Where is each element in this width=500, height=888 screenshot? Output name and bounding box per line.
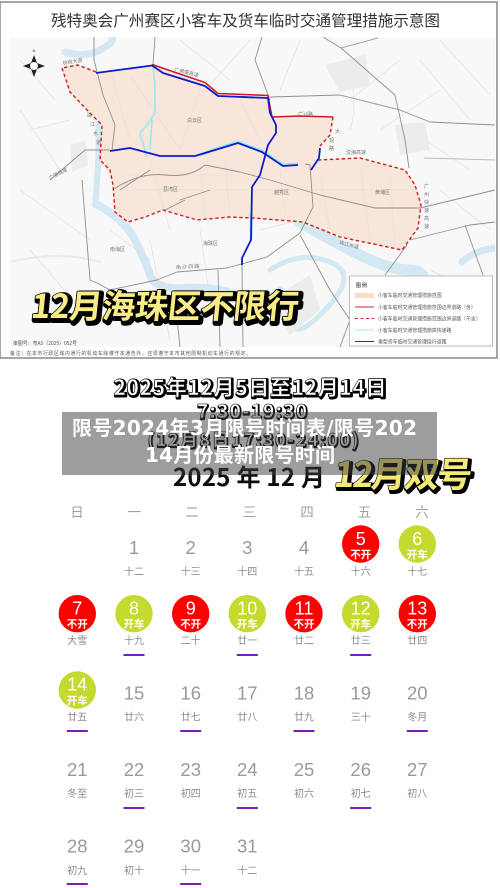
week 2: 11 (295, 598, 313, 618)
week 2: 二十 (181, 632, 201, 647)
week 2 (59, 595, 436, 656)
map labels (48, 57, 390, 271)
week 2: 开车 (237, 616, 258, 632)
week 2: 不开 (294, 616, 315, 632)
map labels: 南海区 (110, 246, 125, 253)
map labels: 广佛肇高速 (174, 66, 199, 79)
weekday row: 四 (300, 501, 314, 521)
label: vertical waterway: 路 (329, 145, 334, 152)
label: vertical waterway: 快 (424, 199, 429, 206)
week 5: 十二 (237, 862, 257, 877)
label: vertical waterway: 广 (424, 183, 429, 190)
grey built-up areas (70, 55, 430, 335)
week 5: 十一 (181, 862, 201, 877)
weekday row: 日 (70, 501, 84, 521)
week 3: 冬月 (407, 708, 427, 724)
time heading: 7:30-19:30 (198, 398, 308, 425)
map frame (0, 2, 497, 358)
weekday row (70, 501, 429, 521)
week 3: 开车 (67, 693, 88, 708)
week 3: 廿六 (124, 708, 144, 724)
weekday row: 三 (243, 501, 256, 521)
week 3: 18 (294, 682, 314, 704)
exception time heading: (12月8日17:30-24:00) (148, 428, 359, 453)
week 2: 10 (237, 598, 257, 618)
week 4: 22 (124, 759, 144, 780)
label: vertical waterway: 道 (96, 139, 101, 146)
banner: Haizhu not restricted: 12月海珠区不限行 (29, 280, 302, 328)
panel: traffic map (0, 2, 497, 358)
map labels: 白云区 (187, 117, 202, 124)
legend: 小客车临时交通管理措施范围 (378, 292, 442, 299)
week 1: 3 (242, 537, 252, 558)
week 2: 廿四 (407, 632, 427, 647)
label: vertical waterway: 江 (90, 121, 95, 128)
week 4: 27 (407, 759, 428, 780)
week 5: 初九 (67, 862, 87, 877)
map title: 残特奥会广州赛区小客车及货车临时交通管理措施示意图 (51, 9, 440, 31)
week 5: 31 (237, 836, 258, 856)
week 2: 廿三 (351, 632, 371, 647)
week 1: 4 (299, 537, 309, 558)
week 3: 19 (350, 682, 371, 704)
week 1: 不开 (350, 547, 372, 562)
week 4: 初七 (351, 785, 371, 800)
week 2: 开车 (124, 616, 144, 632)
even-number badge: 12月双号 (332, 447, 475, 498)
week 1: 十三 (181, 563, 201, 578)
map labels: 广佛高速 (48, 166, 69, 182)
week 1: 十六 (351, 563, 371, 578)
week 3: 廿九 (294, 708, 314, 724)
week 4: 初三 (124, 785, 144, 800)
icon: compass: N (32, 48, 36, 53)
week 1: 十二 (124, 563, 144, 578)
week 3: 三十 (351, 708, 371, 724)
week 3: 廿八 (237, 708, 257, 724)
week 4: 初四 (181, 785, 201, 800)
week 5: 30 (180, 836, 201, 856)
label: vertical waterway: 速 (424, 223, 429, 230)
exception time heading: (12月8日17:30-24:00) (148, 427, 358, 452)
week 4: 初五 (237, 785, 257, 800)
calendar (59, 501, 436, 885)
legend: 图 例 (356, 282, 367, 289)
time heading: 7:30-19:30 (197, 397, 307, 424)
map labels: 沈海高速 (346, 149, 366, 156)
week 4: 初六 (294, 785, 314, 800)
week 4: 21 (67, 759, 88, 780)
week 1: 5 (356, 529, 366, 549)
week 2: 不开 (180, 616, 202, 632)
week 1: 十四 (237, 563, 257, 578)
week 4: 26 (350, 759, 371, 780)
weekday row: 五 (358, 501, 371, 521)
week 4: 25 (294, 759, 314, 780)
panel: calendar heading (114, 372, 477, 500)
week 2: 12 (351, 598, 371, 618)
label: vertical waterway: 高 (424, 215, 429, 222)
week 3: 17 (237, 682, 258, 704)
week 5: 29 (124, 836, 144, 856)
rivers (10, 38, 495, 329)
legend (350, 276, 492, 346)
week 1: 十七 (407, 563, 427, 578)
week 3 (59, 671, 428, 732)
week 2: 十九 (124, 632, 144, 647)
dashed boundary (62, 65, 421, 250)
overlay title text: 限号2024年3月限号时间表/限号202 (72, 416, 417, 440)
weekday row: 二 (185, 501, 199, 521)
week 4: 24 (237, 759, 258, 780)
label: vertical waterway: 速 (424, 207, 429, 214)
legend: 小客车临时交通管理措施高快速路 (378, 327, 451, 334)
week 4: 初八 (407, 785, 427, 800)
week 5 (67, 836, 258, 885)
map labels: 黄埔区 (375, 189, 390, 196)
month heading: 2025 年 12 月 (173, 458, 325, 493)
map approval number: 审图号：粤AS（2025）052号 (13, 340, 77, 347)
week 2: 廿二 (294, 632, 314, 647)
week 1: 2 (186, 537, 196, 558)
week 1: 开车 (407, 547, 428, 562)
overlay title text: 14月份最新限号时间 (145, 443, 335, 467)
map footnote: 备注：在本市行政区域内通行的机动车除遵守本通告外，还须遵守本市其他限制机动车通行的规定。 (10, 350, 251, 357)
week 3: 14 (67, 674, 87, 694)
control zone (62, 65, 421, 250)
blue truck roads (96, 66, 320, 265)
week 1: 十五 (294, 563, 314, 578)
map labels: 越秀区 (274, 189, 289, 196)
week 3: 廿五 (67, 708, 87, 724)
week 1: 6 (412, 529, 422, 549)
label: vertical waterway: 观 (329, 137, 334, 144)
week 5: 初十 (124, 862, 144, 877)
week 2: 开车 (350, 616, 371, 632)
overlay title band (62, 412, 437, 475)
week 4: 23 (180, 759, 201, 780)
map labels: 广汕路 (298, 111, 313, 118)
even-number badge: 12月双号 (334, 449, 477, 500)
week 2: 9 (186, 598, 196, 618)
legend: 重型货车临时交通管理绕行道路 (378, 338, 447, 346)
week 2: 13 (407, 598, 427, 618)
week 2: 不开 (67, 616, 88, 632)
cyan express roads (140, 66, 298, 240)
week 1: 1 (129, 537, 139, 558)
map labels: 珠江水道 (339, 239, 360, 251)
map labels: 钟岗大道 (62, 57, 83, 67)
weekday row: 一 (128, 501, 141, 521)
week 2: 不开 (407, 616, 428, 632)
icon: compass (23, 48, 45, 77)
week 5: 28 (67, 836, 88, 856)
week 3: 20 (407, 682, 428, 704)
week 3: 16 (180, 682, 201, 704)
banner: Haizhu not restricted: 12月海珠区不限行 (31, 282, 304, 330)
overlay title text (72, 416, 417, 467)
label: vertical waterway: 州 (424, 191, 429, 198)
week 4 (67, 759, 428, 809)
label: vertical waterway: 珠 (87, 112, 92, 119)
week 2: 8 (129, 598, 139, 618)
label: vertical waterway (87, 112, 429, 230)
minor roads (20, 40, 490, 340)
map labels: 海珠区 (203, 240, 218, 247)
weekday row: 六 (415, 501, 429, 521)
week 2: 大雪 (67, 632, 87, 647)
map labels: 南 沙 四 路 (176, 263, 199, 271)
date range heading: 2025年12月5日至12月14日 (114, 372, 386, 402)
label: vertical waterway: 水 (93, 130, 98, 137)
week 3: 15 (124, 682, 144, 704)
red boundary roads (152, 64, 333, 117)
major roads (50, 37, 495, 347)
week 2: 7 (72, 598, 82, 618)
legend: 小客车临时交通管理措施范围边界道路（含） (378, 304, 476, 311)
week 2: 廿一 (237, 632, 257, 647)
week 4: 冬至 (67, 785, 87, 800)
label: vertical waterway: 大 (335, 128, 340, 135)
date range heading: 2025年12月5日至12月14日 (114, 373, 388, 403)
week 1 (124, 525, 436, 578)
map drawing (10, 37, 495, 347)
legend: 小客车临时交通管理措施范围边界道路（不含） (378, 316, 481, 322)
map labels: 荔湾区 (163, 186, 178, 193)
week 3: 廿七 (181, 708, 201, 724)
